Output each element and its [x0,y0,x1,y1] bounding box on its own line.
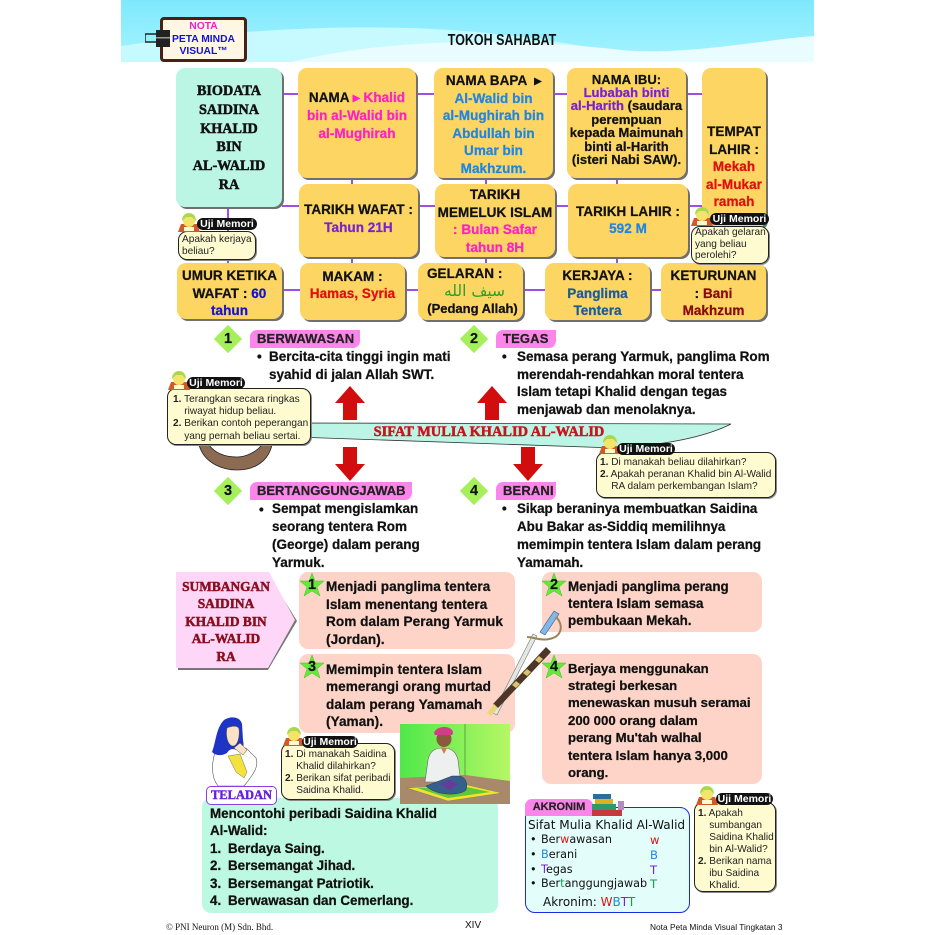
teladan label [206,786,277,805]
uji memori: dilahirkan [596,435,777,499]
questions [596,452,776,498]
panel: nama ibu: (isteri Nabi SAW). [572,152,681,167]
tab [525,799,593,816]
panel: umur ketika wafat: tahun [211,303,248,318]
sifat 4: berani [460,477,761,570]
panel: nama bapa: Al-Walid bin [454,90,533,106]
panel: biodata title [176,68,282,207]
panel: umur ketika wafat: UMUR KETIKA [182,268,277,283]
questions: 2. Berikan sifat peribadi [285,773,390,784]
questions: 2. Apakah peranan Khalid bin Al-Walid [600,469,771,480]
panel: nama ibu: al-Harith (saudara [571,98,682,113]
panel: tempat lahir: ramah [714,194,754,209]
panel: tempat lahir: LAHIR : [709,142,759,156]
arrow up 1 [335,386,365,420]
header band [121,0,814,62]
icon: pupil [168,371,190,390]
body: merendah-rendahkan moral tentera [517,367,744,382]
questions: 2. Berikan nama [698,856,772,866]
number: 4 [550,659,558,675]
panel: nama ibu: perempuan [591,112,662,127]
panel: biodata title: KHALID [200,121,258,137]
questions: 1. Terangkan secara ringkas [173,394,300,405]
text: Memimpin tentera Islam [326,662,482,676]
teladan numbers: 3. [210,876,221,891]
body: menjawab dan menolaknya. [517,402,696,417]
panel: teladan [202,798,498,913]
panel: nama bapa: NAMA BAPA ▸ [446,73,541,88]
body: Bercita-cita tinggi ingin mati [269,349,451,364]
panel: nama ibu: Lubabah binti [584,85,669,100]
questions: RA dalam perkembangan Islam? [611,481,758,492]
teladan list [228,840,413,908]
panel: nama ibu: NAMA IBU: [592,72,661,86]
panel: makam: Hamas, Syria [310,286,395,301]
acronym bullets: • [530,863,537,876]
sumbangan text: RA [216,649,236,664]
body [517,349,770,418]
text: dalam perang Yamamah [326,697,482,712]
panel: tarikh lahir: TARIKH LAHIR : [576,204,680,218]
footer: page number: XIV [465,920,481,931]
question: perolehi? [695,250,737,261]
text: tentera Islam semasa [568,596,703,611]
badge: Uji Memori [619,443,673,455]
panel: biodata title: BIODATA [197,83,261,99]
logo board: PETA MINDA [172,34,235,44]
star 4 [542,655,566,678]
questions: Saidina Khalid. [296,785,364,796]
body [517,501,761,570]
panel: sumbangan 1 [299,572,515,649]
bullet: • [502,501,507,516]
text: Rom dalam Perang Yarmuk [326,614,503,629]
body: Semasa perang Yarmuk, panglima Rom [517,349,770,364]
sumbangan text: SAIDINA [198,596,254,611]
sifat 3: bertanggungjawab [214,477,420,570]
panel: biodata title: BIN [216,139,242,155]
sword blade: sifat mulia [199,422,732,470]
panel: umur ketika wafat [177,263,282,319]
panel: umur ketika wafat: WAFAT : 60 [193,286,266,300]
panel: keturunan [661,263,766,320]
panel: nama ibu: binti al-Harith [584,139,669,154]
badge: Uji Memori [189,377,243,389]
uji memori: sumbangan [694,787,777,893]
panel: tempat lahir: Mekah [713,159,755,174]
panel: tarikh wafat [299,184,418,257]
panel: nama bapa: Umar bin [464,143,523,158]
uji memori: kerjaya [178,213,257,261]
questions: Saidina Khalid [709,832,774,842]
panel: makam: MAKAM : [322,268,383,284]
body: Islam tetapi Khalid dengan tegas [517,384,727,399]
teladan numbers: 4. [210,893,221,908]
star 2 [542,573,566,596]
panel: keturunan: Makhzum [683,303,744,318]
panel: nama bapa: al-Mughirah bin [443,108,544,123]
icon: books [591,793,627,817]
sumbangan text: AL-WALID [192,631,260,646]
bullet: • [502,349,507,364]
panel: nama: bin al-Walid bin [307,108,407,123]
question: beliau? [182,246,215,257]
number: 3 [308,659,316,675]
body [272,501,420,570]
badge: Uji Memori [718,793,771,805]
panel: tarikh lahir [568,184,688,257]
body [269,349,451,382]
teladan intro [210,806,437,838]
panel: kerjaya: KERJAYA : [562,268,633,283]
text [326,579,504,648]
panel: tarikh memeluk islam: : Bulan Safar [453,222,537,237]
questions [167,388,311,445]
acronym words: Berani [541,848,577,861]
sumbangan text [182,579,270,664]
panel: nama ibu: kepada Maimunah [570,125,683,140]
acronym bullets: • [530,848,537,861]
arrow up 2 [477,386,507,420]
teladan numbers: 1. [210,840,221,856]
teladan list: Berwawasan dan Cemerlang. [228,893,413,908]
logo: nota peta minda visual [145,17,247,62]
body: (George) dalam perang [272,537,420,552]
questions: riwayat hidup beliau. [184,406,276,417]
question: yang beliau [695,239,747,250]
text [568,578,729,628]
text: Menjadi panglima tentera [326,579,490,594]
panel: kerjaya: Panglima [567,286,628,300]
title: TOKOH SAHABAT [448,32,556,49]
teladan list: Berdaya Saing. [228,840,325,856]
panel: kerjaya [545,263,650,320]
number diamond [214,325,242,353]
text: tentera Islam hanya 3,000 [568,748,728,763]
panel: tarikh memeluk islam: tahun 8H [466,240,524,254]
arrow down 1 [335,447,365,481]
teladan list: Bersemangat Patriotik. [228,876,374,891]
text: orang. [568,765,608,780]
panel: nama: al-Mughirah [318,126,396,141]
body: Sempat mengislamkan [272,501,418,516]
bullet: • [257,349,262,364]
teladan numbers [210,840,221,908]
questions: 2. Berikan contoh peperangan [173,418,308,429]
panel: nama ibu [567,68,686,178]
footer: book title: Nota Peta Minda Visual Tingkatan 3 [650,922,783,932]
questions: sumbangan [709,820,762,830]
panel: biodata title: SAIDINA [199,102,259,118]
panel: tempat lahir: al-Mukar [706,176,762,192]
questions: Khalid dilahirkan? [296,761,376,772]
icon: pupil [696,786,718,806]
panel: sumbangan 2 [542,572,762,632]
body: memimpin tentera Islam dalam perang [517,537,761,552]
panel: sumbangan pentagon [176,572,297,670]
acronym letters [650,833,659,892]
panel: biodata title: AL-WALID [193,158,265,174]
panel: tarikh memeluk islam: TARIKH [470,187,520,202]
panel: nama bapa: Abdullah bin [452,126,535,140]
uji memori: sifat peribadi [281,729,396,800]
panel: biodata title: RA [219,177,239,193]
panel: gelaran [418,263,523,320]
text [326,662,491,730]
body: seorang tentera Rom [272,519,407,534]
panel: sumbangan 3 [299,654,515,733]
acronym bullets: • [530,833,537,846]
sifat 2: tegas: 2 [470,331,478,347]
number diamond [460,325,488,353]
panel: nama bapa [434,68,553,178]
panel: keturunan: : Bani [695,286,732,300]
heading: BERWAWASAN [257,331,354,346]
question: Apakah kerjaya [182,234,252,245]
text: (Jordan). [326,632,385,647]
body: Yarmuk. [272,555,325,570]
panel: makam [300,263,405,320]
arabic title: سيف الله [444,282,505,300]
number: 2 [550,577,558,593]
text: Islam menentang tentera [326,597,487,612]
acronym words: Berwawasan [541,833,612,846]
panel: sumbangan 4 [542,654,762,784]
icon: pupil [691,207,713,226]
acronym result: Akronim: WBTT [543,895,635,909]
acronym box [525,807,690,913]
panel: tarikh wafat: TARIKH WAFAT : [304,202,413,217]
acronym letters: T [650,863,657,877]
teladan numbers: 2. [210,858,221,873]
questions [281,743,395,800]
number: 1 [308,577,316,593]
logo board: NOTA [189,21,218,32]
heading: BERANI [503,483,554,498]
questions: yang pernah beliau sertai. [184,431,300,442]
acronym words: Tegas [541,863,573,876]
panel: tempat lahir [702,68,766,228]
acronym words [541,833,647,892]
teladan intro: Mencontohi peribadi Saidina Khalid [210,806,437,820]
badge: Uji Memori [713,213,766,225]
questions [694,802,776,892]
text: strategi berkesan [568,678,677,693]
body: syahid di jalan Allah SWT. [269,367,434,382]
panel: nama [298,68,416,178]
arrow down 2 [513,447,543,481]
acronym letters: B [650,848,658,862]
acronym heading: Sifat Mulia Khalid Al-Walid [528,818,685,832]
number diamond [214,477,242,505]
question [691,226,769,264]
panel: nama: NAMA ▸ Khalid [309,90,405,105]
questions: Khalid. [709,880,740,890]
panel: nama bapa: Makhzum. [461,160,526,176]
body: Abu Bakar as-Siddiq memilihnya [517,519,725,534]
star 3 [300,655,324,678]
text: Menjadi panglima perang [568,578,729,594]
icon: sword illustration [487,610,562,716]
sifat 3: bertanggungjawab: 3 [224,483,232,499]
questions: 1. Apakah [698,808,743,818]
body: Yamamah. [517,555,583,570]
sifat 1: berwawasan [214,325,451,382]
text [568,660,751,780]
badge: Uji Memori [303,736,357,748]
sifat 2: tegas [460,325,770,418]
questions: 1. Di manakah beliau dilahirkan? [600,457,746,468]
text: menewaskan musuh seramai [568,695,751,710]
panel: kerjaya: Tentera [573,303,622,318]
panel: tarikh lahir: 592 M [609,221,647,236]
text: Berjaya menggunakan [568,660,709,676]
heading: BERTANGGUNGJAWAB [257,483,406,498]
number diamond [460,477,488,505]
uji memori: gelaran [691,207,770,265]
illustration: girl in hijab [212,717,258,786]
questions: bin Al-Walid? [709,844,768,854]
illustration: man sitting on prayer mat [400,724,510,804]
sumbangan text: KHALID BIN [185,614,267,629]
binder clip icon [145,30,170,47]
footer: copyright: © PNI Neuron (M) Sdn. Bhd. [166,922,273,932]
heading: TEGAS [503,331,549,346]
acronym letters: T [650,877,657,891]
gelaran label: GELARAN : [427,266,502,281]
text: pembukaan Mekah. [568,613,692,628]
sword title: SIFAT MULIA KHALID AL-WALID [374,424,604,440]
questions: 1. Di manakah Saidina [285,749,387,760]
teladan label: TELADAN [211,788,272,802]
text: (Yaman). [326,714,383,729]
teladan list: Bersemangat Jihad. [228,858,355,873]
panel: tarikh wafat: Tahun 21H [324,220,393,234]
acronym words: Bertanggungjawab [541,877,647,890]
badge: Uji Memori [200,218,254,230]
bullet: • [259,502,264,517]
sifat 1: berwawasan: 1 [224,331,232,347]
sifat 4: berani: 4 [470,483,478,499]
pentagon shape [176,572,297,670]
uji memori: riwayat hidup [167,371,312,446]
acronym bullets [530,833,537,892]
question: Apakah gelaran [695,227,766,238]
body: Sikap beraninya membuatkan Saidina [517,501,757,516]
acronym bullets: • [530,877,537,890]
logo board [160,17,247,62]
heading [496,330,556,348]
logo board: VISUAL™ [179,46,228,57]
questions: ibu Saidina [709,868,759,878]
star 1 [300,573,324,596]
teladan intro: Al-Walid: [210,823,268,838]
acronym letters: w [650,833,659,847]
tab: AKRONIM [533,801,585,813]
panel: tempat lahir: TEMPAT [707,124,761,139]
icon: pupil [599,435,620,454]
icon: pupil [178,213,200,232]
text: memerangi orang murtad [326,679,491,694]
question [178,231,256,260]
panel: tarikh memeluk islam: MEMELUK ISLAM [438,204,552,220]
panel: keturunan: KETURUNAN [671,268,756,283]
pedang allah: (Pedang Allah) [427,301,518,316]
text: perang Mu'tah walhal [568,730,702,745]
panel: tarikh memeluk islam [435,184,555,257]
sumbangan text: SUMBANGAN [182,579,270,594]
panel: akronim [525,793,693,915]
icon: pupil [283,727,305,747]
text: 200 000 orang dalam [568,713,698,728]
